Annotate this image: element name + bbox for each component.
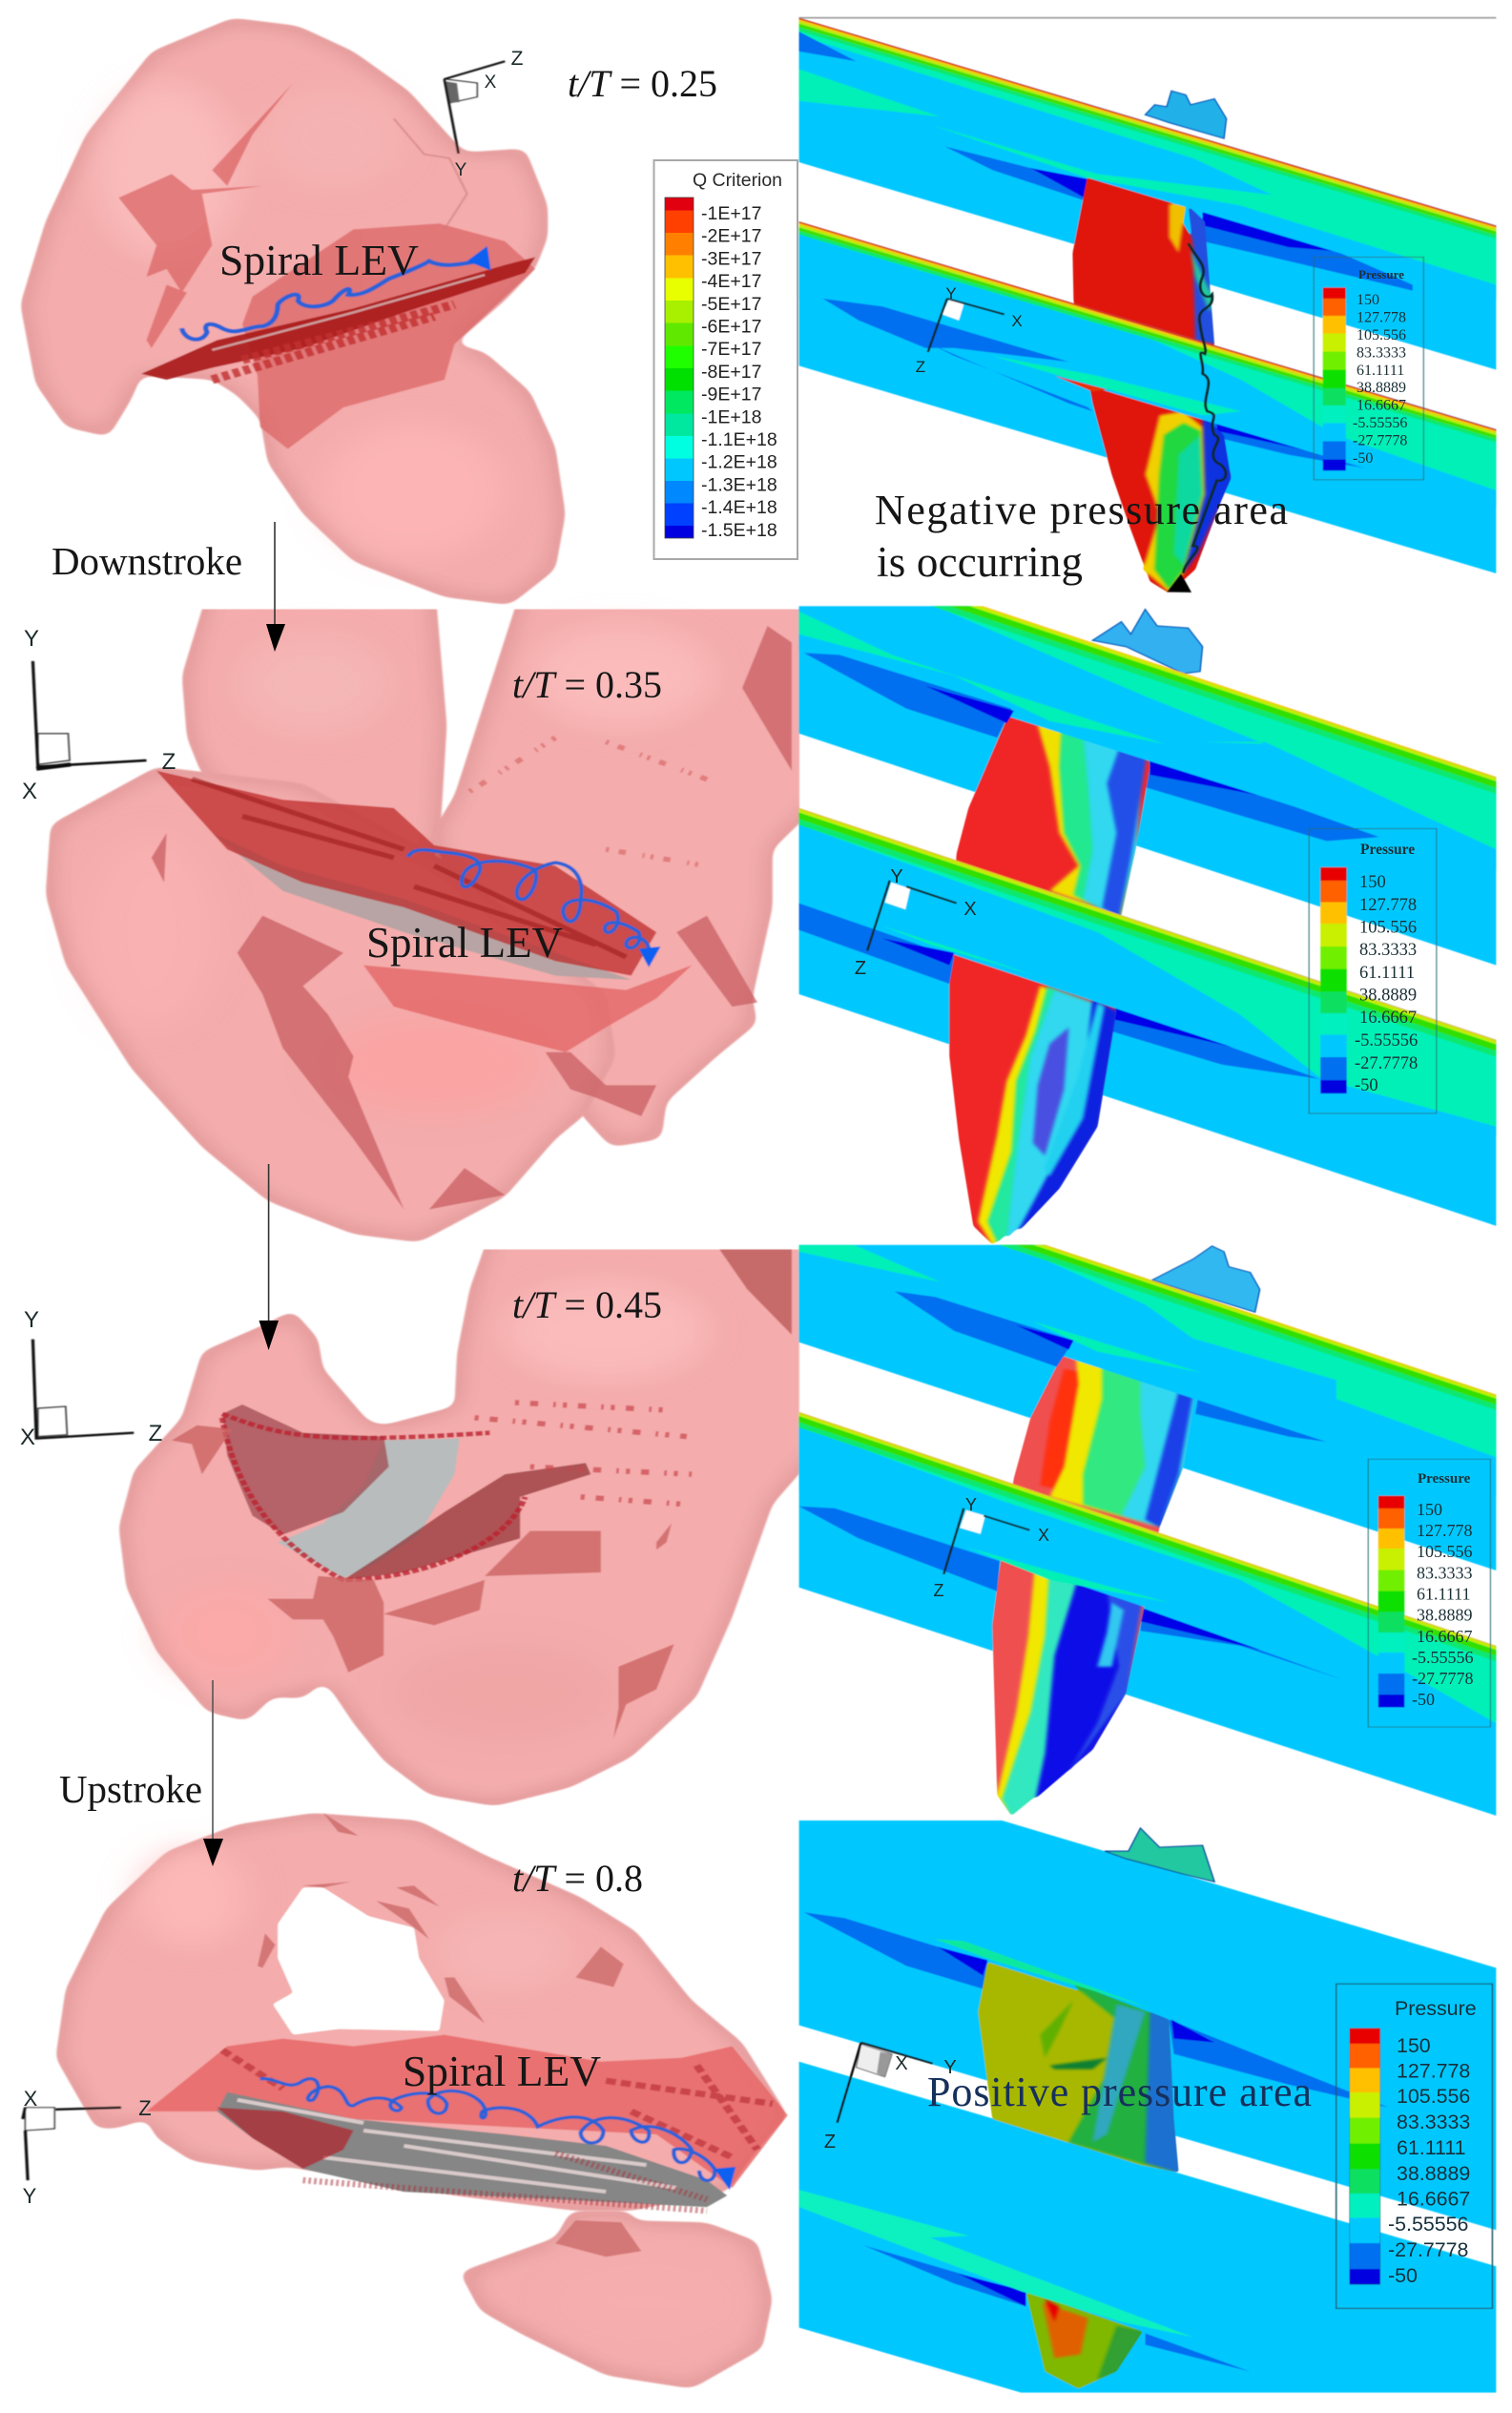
pressure legend frame and bar — [1336, 1984, 1492, 2308]
axis letters: X — [1011, 312, 1023, 330]
pressure legend labels: Pressure — [1360, 842, 1415, 858]
upstroke label: Upstroke — [59, 1767, 202, 1811]
axis letters: Y — [455, 160, 467, 180]
low-pressure wakes behind wing — [1140, 1385, 1413, 1680]
axis letters: X — [20, 1425, 35, 1450]
vortex isosurface artwork — [23, 1813, 788, 2389]
light highlights — [136, 1847, 737, 2341]
wing tip fringe — [1105, 1828, 1214, 1882]
spiral LEV label: Spiral LEV — [366, 919, 563, 967]
axis letters: X — [24, 2087, 38, 2111]
blue spiral LEV path — [408, 850, 649, 948]
spiral LEV label: Spiral LEV — [219, 237, 419, 284]
upper plane — [799, 606, 1496, 966]
axis letters: Z — [855, 958, 866, 979]
axis letters: X — [895, 2053, 908, 2074]
upper plane — [799, 1820, 1496, 2230]
axis letters: Z — [138, 2096, 152, 2120]
blue spiral LEV path — [182, 261, 480, 340]
arrow: upstroke — [203, 1680, 223, 1866]
arrow: downstroke second step — [259, 1164, 279, 1350]
colour labels: -1.3E+18 — [701, 474, 777, 495]
colour labels: -8E+17 — [701, 362, 761, 383]
vortex isosurface artwork — [31, 1248, 800, 1806]
colour labels: -2E+17 — [701, 226, 761, 247]
pressure legend labels: 16.6667 — [1359, 1009, 1417, 1028]
teal contour bands — [799, 1245, 1496, 1457]
upper plane front part — [799, 1245, 1496, 1497]
axis letters — [933, 1495, 1049, 1600]
dark corner sheet — [719, 1249, 792, 1335]
lower plane — [799, 2062, 1496, 2393]
pressure artwork — [799, 1163, 1496, 1816]
axis letters: Y — [24, 626, 39, 652]
left dark vortex loop — [222, 1404, 389, 1534]
upper left lobe — [181, 609, 448, 855]
colour labels: -1.4E+18 — [701, 497, 777, 518]
wing streaks — [238, 2100, 676, 2192]
wing surface — [978, 1962, 1179, 2389]
light highlights — [86, 626, 712, 1114]
upper plane front part — [799, 606, 1496, 870]
pressure legend labels: 61.1111 — [1417, 1584, 1471, 1603]
axis letters: Y — [965, 1495, 977, 1514]
pressure legend labels: 150 — [1417, 1500, 1442, 1519]
blue arrow head — [639, 946, 660, 967]
wing tip fringe — [1145, 91, 1227, 138]
pressure legend labels — [1355, 842, 1418, 1095]
pressure legend labels: -27.7778 — [1388, 2238, 1468, 2261]
axis letters: Y — [943, 2057, 957, 2078]
left wakes lower — [799, 904, 954, 984]
lower plane front part — [799, 221, 1496, 508]
pressure stripes lower — [799, 1412, 1496, 1661]
pressure legend labels: -50 — [1355, 1076, 1378, 1095]
black spiral LEV path — [1184, 243, 1226, 573]
panel: pressure at t/T = 0.8 — [799, 1820, 1496, 2393]
pressure stripes lower — [799, 808, 1496, 1057]
lower vortex lobe — [460, 2211, 773, 2389]
wing tip fringe — [1152, 1246, 1260, 1312]
pressure legend labels: 16.6667 — [1357, 397, 1406, 414]
pressure legend labels: 105.556 — [1397, 2085, 1470, 2108]
legend title: Q Criterion — [693, 171, 782, 191]
upper right lobe — [437, 609, 800, 1147]
light highlights — [161, 1281, 707, 1742]
pink lobes, cut at panel edge — [118, 1249, 800, 1806]
pressure legend labels: Pressure — [1418, 1471, 1471, 1487]
vortex isosurface artwork — [31, 609, 800, 1242]
time label: t/T = 0.25 — [568, 62, 717, 105]
pressure legend frame and bar — [1309, 829, 1437, 1113]
pressure legend labels: 61.1111 — [1397, 2136, 1466, 2159]
pressure legend labels: 127.778 — [1357, 309, 1406, 326]
low-pressure wakes behind wing — [930, 146, 1413, 470]
low-pressure wakes behind wing — [1107, 754, 1379, 1079]
axis letters: Z — [162, 749, 176, 775]
red vortex body — [146, 2035, 788, 2188]
pressure legend labels: -27.7778 — [1353, 433, 1407, 448]
top rule — [798, 16, 1497, 19]
blue arrow head — [467, 246, 490, 271]
axis letters — [23, 2087, 152, 2208]
axes triad — [32, 661, 146, 769]
lower plane — [799, 1412, 1496, 1816]
pressure legend labels: -50 — [1388, 2264, 1418, 2287]
axis letters — [855, 866, 977, 979]
pressure stripes upper — [799, 18, 1496, 239]
lower plane — [799, 221, 1496, 573]
axis letters: X — [485, 73, 497, 93]
wing surface — [1072, 174, 1232, 593]
pressure legend labels: 16.6667 — [1417, 1627, 1473, 1646]
arrow: downstroke first step — [266, 522, 285, 652]
colour labels: -9E+17 — [701, 385, 761, 406]
low-pressure wakes behind wing — [804, 1912, 1389, 2372]
axes triad — [23, 2108, 121, 2180]
axis letters: X — [1038, 1526, 1049, 1545]
lower plane front part — [799, 1412, 1496, 1725]
pressure artwork — [799, 18, 1496, 593]
lower wing patch — [363, 966, 692, 1052]
axis letters — [824, 2053, 957, 2153]
axes triad — [943, 1508, 1029, 1574]
pressure legend labels: 38.8889 — [1359, 987, 1417, 1006]
pressure legend labels: 127.778 — [1417, 1521, 1473, 1540]
pressure legend labels: -5.55556 — [1353, 415, 1407, 431]
blue spiral LEV path — [260, 2079, 715, 2180]
colour bar — [665, 198, 694, 538]
axes triad — [32, 1340, 134, 1439]
colour labels: -5E+17 — [701, 294, 761, 315]
axes triad — [838, 2043, 933, 2123]
axis letters: Y — [24, 1307, 39, 1333]
pressure legend labels — [1412, 1471, 1473, 1709]
leading-edge vortex sheet — [156, 771, 656, 975]
pressure legend labels — [1353, 267, 1407, 467]
pressure legend labels: 105.556 — [1417, 1542, 1473, 1561]
dark sheet fragments — [172, 1425, 674, 1738]
axes triad — [867, 881, 957, 950]
black arrow head — [1167, 573, 1191, 593]
time label: t/T = 0.8 — [512, 1857, 643, 1900]
red streak at plate tip — [1054, 376, 1107, 391]
vortex isosurface artwork — [20, 18, 566, 605]
axis letters — [20, 1307, 162, 1450]
red sheet fragments — [118, 83, 535, 448]
pressure legend labels: 61.1111 — [1357, 363, 1404, 379]
teal contour bands — [799, 24, 1496, 284]
colour labels: -3E+17 — [701, 248, 761, 269]
teal wing-plate slivers — [799, 1939, 1193, 2338]
red haze on wing — [217, 2108, 354, 2169]
pressure legend labels: Pressure — [1358, 267, 1404, 281]
upper plane front part — [799, 18, 1496, 300]
left wakes upper — [804, 653, 1014, 738]
pressure legend frame and bar — [1314, 257, 1423, 480]
pink vortex blob — [118, 1249, 800, 1806]
annotation: negative pressure area: Negative pressure area — [875, 487, 1288, 533]
axes triad — [445, 61, 505, 154]
pressure legend labels: 127.778 — [1397, 2059, 1470, 2082]
colour labels: -7E+17 — [701, 339, 761, 360]
annotation: positive pressure area: Positive pressure area — [927, 2069, 1312, 2115]
axes triad — [928, 299, 1005, 352]
pressure legend labels: 83.3333 — [1359, 941, 1417, 960]
wing surface — [992, 1333, 1200, 1816]
axis letters: Y — [890, 866, 903, 887]
teal contour bands — [799, 606, 1496, 849]
panel: Q criterion vortex at t/T = 0.35 — [23, 609, 800, 1242]
gap in the arch — [273, 1887, 445, 2035]
pressure stripes upper — [799, 545, 1496, 794]
pressure legend labels — [1388, 1997, 1477, 2287]
panel: Q criterion vortex at t/T = 0.45 — [21, 1248, 800, 1811]
axis letters — [916, 284, 1023, 376]
pressure legend labels: -5.55556 — [1412, 1648, 1473, 1667]
scattered vortex fragments — [475, 1403, 692, 1505]
wing surface — [278, 1439, 460, 1578]
pressure artwork — [799, 1820, 1496, 2393]
lower plane — [799, 808, 1496, 1226]
pressure legend labels: 150 — [1357, 292, 1379, 308]
annotation: negative pressure area: is occurring — [877, 538, 1083, 586]
colour labels: -6E+17 — [701, 317, 761, 338]
upper plane — [799, 1245, 1496, 1571]
wing tip fringe — [1092, 610, 1203, 674]
pressure legend labels: 61.1111 — [1359, 964, 1415, 983]
pressure artwork — [799, 545, 1496, 1244]
lower plane front part — [799, 808, 1496, 1134]
wing surface — [217, 2092, 727, 2207]
pressure legend labels: -5.55556 — [1388, 2213, 1468, 2236]
pink vortex blob — [20, 18, 566, 605]
scattered vortex fragments — [469, 738, 717, 866]
teal contour bands lower — [799, 817, 1496, 1127]
teal contour bands lower — [799, 1418, 1496, 1723]
spiral LEV label: Spiral LEV — [403, 2048, 601, 2095]
axis letters: Z — [933, 1581, 944, 1600]
downstroke label: Downstroke — [52, 539, 242, 583]
pressure legend labels: -50 — [1353, 450, 1373, 467]
panel: Q criterion vortex at t/T = 0.8 — [23, 1813, 788, 2389]
left wakes — [799, 31, 1068, 362]
time label: t/T = 0.35 — [512, 663, 662, 706]
light highlights — [96, 83, 505, 557]
pressure legend labels: 150 — [1397, 2034, 1431, 2057]
axis letters: Z — [149, 1421, 162, 1446]
pressure stripes upper — [799, 1163, 1496, 1410]
teal contour bands lower — [799, 231, 1496, 490]
dark sheet fragments — [152, 626, 792, 1210]
pressure legend labels: Pressure — [1395, 1997, 1477, 2020]
colour labels: -1E+17 — [701, 203, 761, 224]
colour labels: -1.1E+18 — [701, 429, 777, 450]
legend: Q criterion — [654, 160, 797, 559]
panel: Q criterion vortex at t/T = 0.25 — [20, 18, 717, 605]
axis letters: Z — [824, 2132, 836, 2153]
lower vortex lobe — [46, 766, 616, 1242]
leading-edge vortex sheet — [141, 257, 535, 380]
pressure legend labels: 105.556 — [1359, 918, 1417, 937]
colour labels: -1.2E+18 — [701, 452, 777, 473]
colour labels: -4E+17 — [701, 271, 761, 292]
panel: pressure at t/T = 0.35 — [799, 545, 1496, 1244]
right dark vortex streak — [343, 1463, 590, 1580]
upper plane — [799, 18, 1496, 370]
pressure legend labels: 105.556 — [1357, 327, 1406, 343]
panel: pressure at t/T = 0.45 — [799, 1163, 1496, 1816]
axis letters: Y — [23, 2184, 37, 2208]
annotation: negative pressure area — [875, 487, 1288, 586]
red rim — [222, 1414, 525, 1580]
pressure legend labels: 150 — [1359, 873, 1386, 892]
axis letters — [22, 626, 176, 804]
wing surface — [212, 833, 632, 980]
pressure legend labels: 38.8889 — [1357, 380, 1406, 396]
panel: pressure at t/T = 0.25 — [799, 18, 1496, 593]
main arch vortex — [55, 1813, 788, 2211]
pressure legend labels: -27.7778 — [1412, 1669, 1473, 1688]
pressure legend labels: 38.8889 — [1397, 2162, 1470, 2185]
colour labels: -1E+18 — [701, 406, 761, 427]
pressure legend labels: 16.6667 — [1397, 2187, 1470, 2210]
left wakes lower — [799, 1507, 1000, 1591]
time label: t/T = 0.45 — [512, 1283, 662, 1326]
colour labels — [701, 203, 777, 541]
pressure legend labels: -27.7778 — [1355, 1054, 1418, 1073]
axis letters: Z — [511, 48, 524, 70]
colour labels: -1.5E+18 — [701, 520, 777, 541]
wing surface — [949, 702, 1150, 1244]
axis letters — [455, 48, 524, 180]
pressure legend labels: -50 — [1412, 1690, 1435, 1709]
dark sheet fragments — [258, 1813, 641, 2257]
pressure legend labels: 83.3333 — [1397, 2111, 1470, 2133]
pressure stripes lower — [799, 221, 1496, 443]
axis letters: X — [22, 779, 37, 804]
pressure legend labels: 83.3333 — [1417, 1563, 1473, 1582]
pressure legend frame and bar — [1368, 1459, 1490, 1727]
pink lobes, cut at panel edge — [45, 609, 800, 1242]
pressure legend labels: -5.55556 — [1355, 1031, 1418, 1050]
axis letters: Y — [945, 284, 957, 302]
axis letters: Z — [916, 358, 925, 376]
pressure legend labels: 127.778 — [1359, 896, 1417, 915]
blue arrow head — [715, 2167, 735, 2190]
axis letters: X — [963, 899, 977, 920]
pressure legend labels: 38.8889 — [1417, 1605, 1473, 1624]
left wakes upper — [895, 1291, 1073, 1366]
pressure legend labels: 83.3333 — [1357, 345, 1406, 361]
